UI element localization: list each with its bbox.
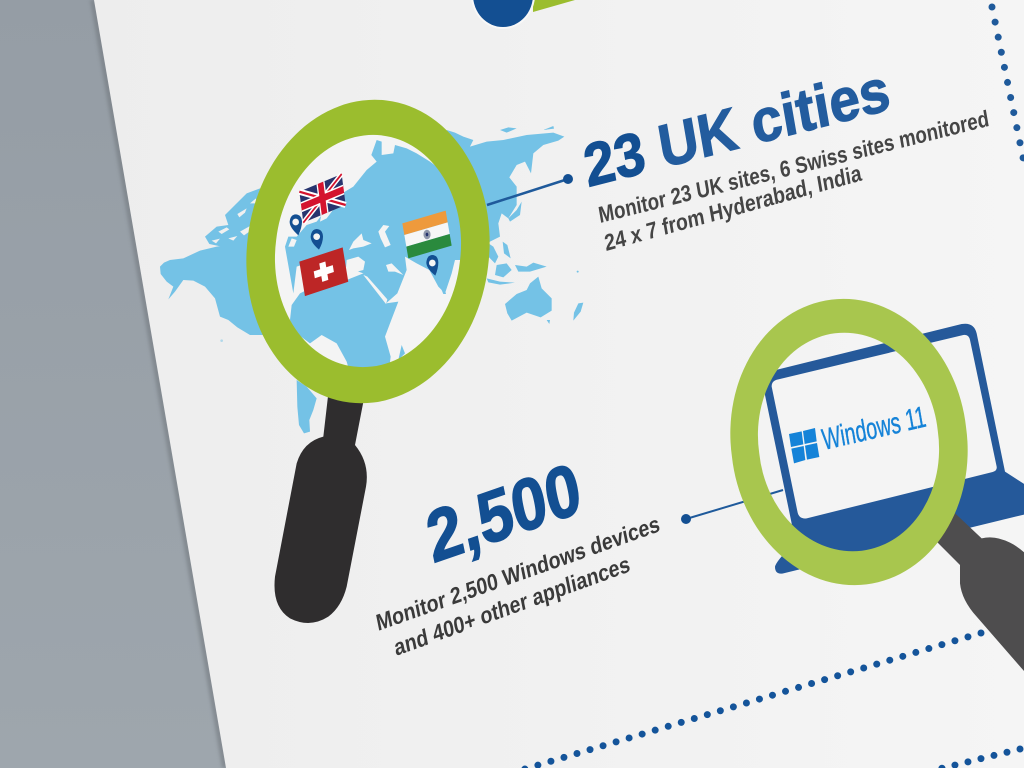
logo text: Windows 11: Windows 11 — [820, 401, 928, 457]
text: cities description line 2: 24 x 7 from Hyderabad, India — [602, 160, 863, 256]
icon: map pin India — [426, 255, 438, 276]
new zealand — [573, 303, 583, 321]
flag: India — [402, 211, 452, 258]
eurasia — [285, 140, 462, 304]
map detail: arctic inlets — [212, 198, 256, 243]
laptop with magnifier — [730, 299, 1024, 720]
lens content: magnified map — [285, 140, 462, 368]
magnifier ring: light green — [730, 299, 968, 585]
seas and lakes — [288, 200, 446, 360]
icon: map pin Switzerland — [311, 229, 323, 250]
africa — [290, 273, 398, 373]
north america — [160, 233, 263, 335]
dotted line: lower divider — [515, 633, 981, 768]
icon: laptop — [765, 324, 1024, 574]
lens background — [263, 130, 477, 373]
icon: map pin UK — [290, 214, 302, 235]
text: devices description line 2: and 400+ other appliances — [392, 550, 632, 661]
heading: 2,500: 2,500 — [420, 448, 587, 579]
magnifier handle — [937, 512, 1024, 720]
connector line: cities — [487, 174, 573, 205]
icon: Windows logo — [789, 428, 819, 463]
flag: Switzerland — [299, 247, 348, 296]
paper edge shadow — [90, 0, 228, 768]
heading: 23 UK cities: 23 UK cities — [579, 56, 894, 200]
world map with magnifier — [160, 100, 583, 623]
east asia — [447, 130, 564, 247]
magnifier ring: green — [246, 100, 490, 403]
flag: United Kingdom — [299, 174, 346, 223]
world map: outside the lens — [160, 126, 583, 433]
south east asia and islands — [483, 240, 498, 263]
connector line: devices — [681, 490, 783, 524]
icon: cropped circle and arrow from previous section — [471, 0, 575, 29]
arctic islands — [205, 188, 263, 247]
australia — [505, 277, 552, 321]
dotted line: right border — [992, 7, 1024, 172]
magnifier handle — [274, 393, 367, 623]
dotted line: bottom right divider — [935, 749, 1020, 768]
text: devices description line 1: Monitor 2,500 Windows devices — [374, 510, 662, 636]
south america — [297, 380, 317, 433]
